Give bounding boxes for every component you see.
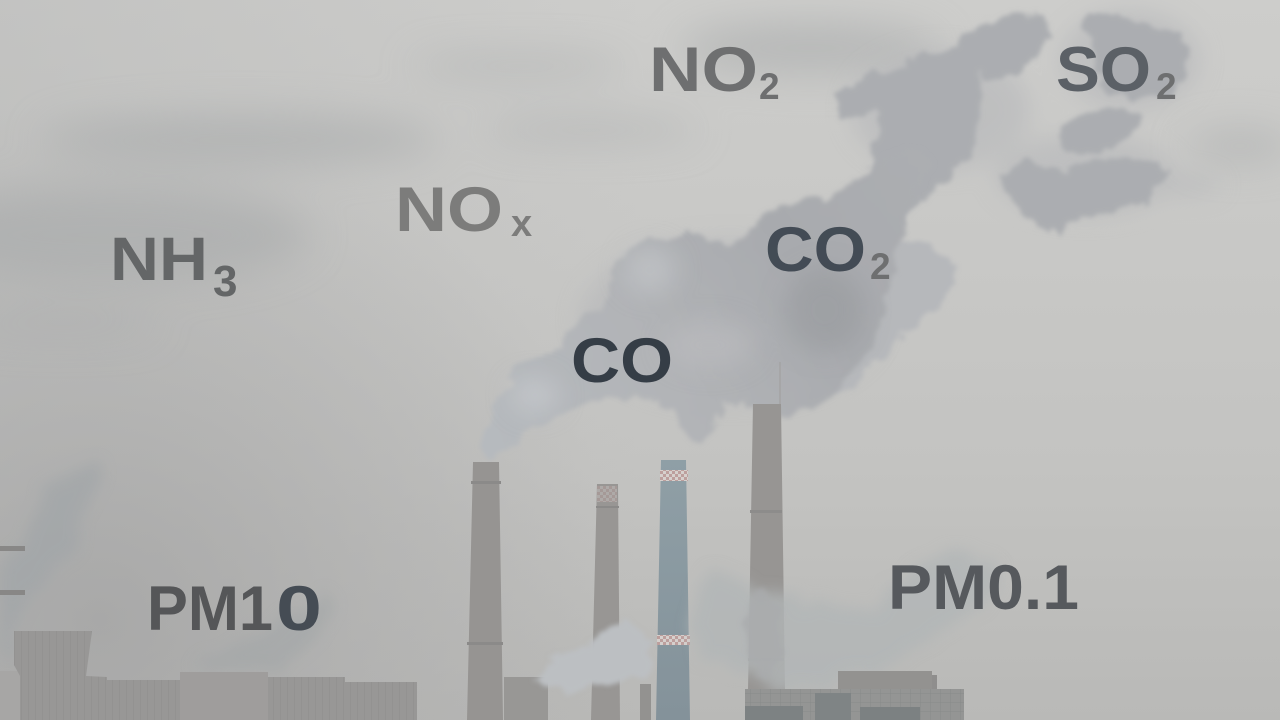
label: NO2: NO bbox=[649, 35, 758, 105]
label: PM10: PM1 bbox=[147, 574, 273, 644]
cranes, left edge bbox=[0, 546, 25, 595]
label: NOx: NO bbox=[395, 175, 503, 245]
label: CO2: CO bbox=[765, 215, 866, 285]
smoke plume: lighter wisps on right side bbox=[823, 235, 953, 393]
label: NOx bbox=[395, 175, 532, 245]
label: NO2: 2 bbox=[759, 66, 780, 107]
smoke stack 2 bbox=[591, 484, 620, 720]
smoke plume: main cloud from first stack to the upper right bbox=[484, 148, 927, 463]
cooling towers, left bbox=[0, 631, 417, 720]
label: SO2: 2 bbox=[1156, 66, 1177, 107]
label: NH3: 3 bbox=[213, 257, 237, 306]
lower steam clouds bbox=[535, 554, 1004, 691]
smoke stack 4: tall bbox=[748, 362, 785, 690]
label: NH3: NH bbox=[110, 225, 208, 293]
label: PM0.1: PM0.1 bbox=[888, 553, 1079, 623]
smoke stack 3: blue with checker bands bbox=[656, 460, 690, 720]
power plant building bbox=[745, 671, 964, 720]
low building and small stack bbox=[504, 677, 651, 720]
label: PM10: 0 bbox=[276, 574, 322, 644]
smoke: soft halo around plume bbox=[580, 10, 1220, 400]
distant smoke, left bbox=[0, 455, 333, 672]
label: SO2: SO bbox=[1056, 35, 1151, 105]
label: CO2: 2 bbox=[870, 246, 891, 287]
smoke stack 1 bbox=[467, 462, 503, 720]
plume shading bbox=[511, 246, 865, 413]
label: NOx: x bbox=[511, 203, 532, 245]
smoke: upper branch of plume and drifting patches bbox=[835, 11, 1189, 237]
label: NH3 bbox=[110, 225, 237, 306]
label: CO: CO bbox=[571, 326, 673, 396]
